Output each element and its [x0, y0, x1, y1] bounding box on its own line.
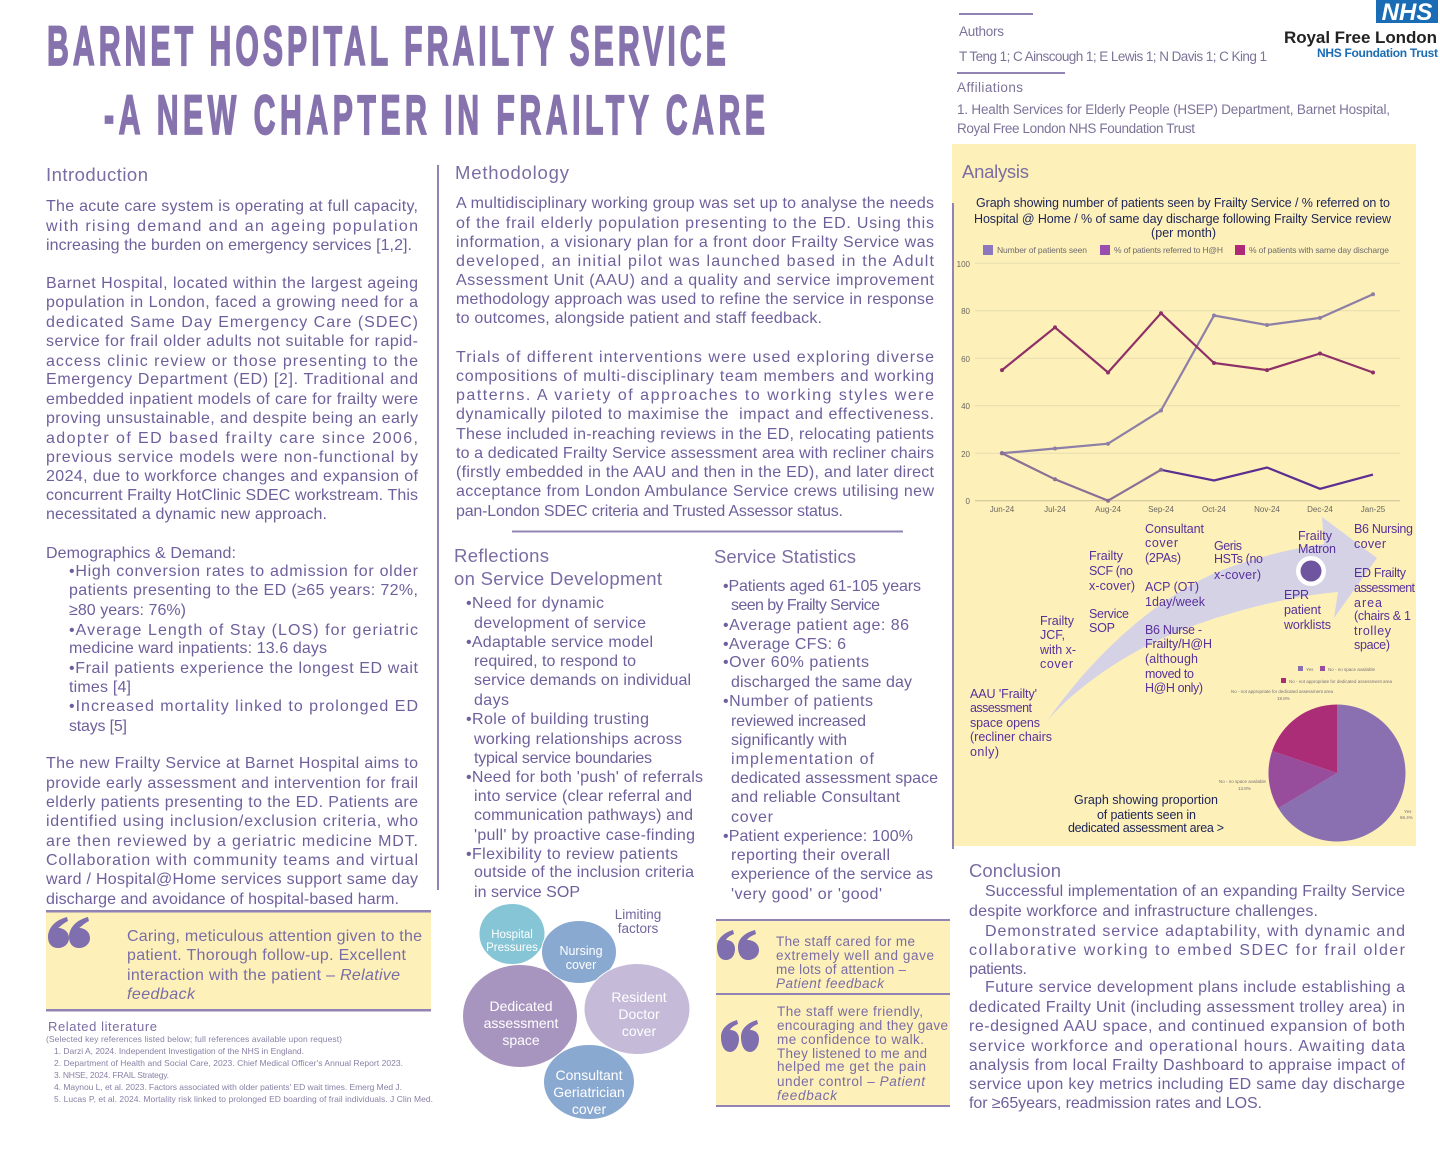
chart: limiting factors bubbles — [462, 904, 690, 1120]
pie chart: 13.8% — [1238, 786, 1251, 791]
text block: conclusion body: service upon key metrics including ED same day discharge — [969, 1076, 1405, 1093]
text block: introduction body: ward / Hospital@Home services support same day — [45, 871, 418, 888]
text block: conclusion body: for ≥65years, readmission rates and LOS. — [969, 1095, 1262, 1112]
quote text — [127, 928, 422, 1003]
label: B6 nursing cover and ED area: (chairs & 1 — [1354, 609, 1411, 623]
quote text: interaction with the patient – Relative — [127, 967, 400, 984]
text block: methodology body: pan-London SDEC criteria and Trusted Assessor status. — [456, 503, 843, 520]
icon: timeline marker — [1296, 556, 1326, 586]
text block: statistics bullets: •Number of patients — [723, 693, 873, 710]
text block: related literature: 2. Department of Health and Social Care, 2023. Chief Medical Officer's Annual Report 2023. — [54, 1058, 403, 1068]
pie chart: Yes — [1404, 809, 1412, 814]
label: consultant, ACP and B6 nurse: cover — [1145, 536, 1178, 550]
label: B6 nursing cover and ED area — [1354, 522, 1416, 652]
label: frailty SCF and service SOP: Frailty — [1089, 549, 1124, 563]
line chart: Jul-24 — [1044, 505, 1066, 514]
quote text: staff friendly: feedback — [777, 1088, 838, 1103]
bubble: dedicated assessment space — [462, 964, 578, 1068]
text block: statistics bullets: 'very good' or 'good' — [731, 886, 882, 903]
text block: introduction body: The acute care system is operating at full capacity, — [46, 198, 418, 215]
label: limiting factors: Limiting — [615, 907, 661, 922]
label: consultant, ACP and B6 nurse: (although — [1145, 652, 1198, 666]
label: EPR patient worklists: worklists — [1283, 618, 1331, 632]
label: frailty SCF and service SOP: SOP — [1089, 621, 1115, 635]
label: frailty matron — [1298, 529, 1336, 556]
label: geris HSTs — [1214, 539, 1263, 582]
text block: reflections bullets: typical service boundaries — [474, 750, 652, 767]
text block: introduction body: service for frail older adults not suitable for rapid- — [46, 333, 418, 350]
text block: statistics bullets: •Average patient age: 86 — [723, 617, 909, 634]
label: frailty matron: Frailty — [1298, 529, 1333, 543]
chart legend: % of patients with same day discharge — [1249, 245, 1389, 255]
chart legend: % of patients referred to H@H — [1114, 245, 1223, 255]
text block: related literature: Related literature — [48, 1019, 157, 1034]
heading: service statistics: Service Statistics — [714, 546, 856, 567]
pie chart caption: of patients seen in — [1097, 808, 1196, 822]
column divider — [437, 165, 439, 890]
text block: reflections bullets: •Need for both 'push' of referrals — [466, 769, 703, 786]
text block: methodology body: to outcomes, alongside patient and staff feedback. — [456, 310, 822, 327]
text block: methodology body: information, a visionary plan for a front door Frailty Service was — [456, 234, 934, 251]
bubble: hospital pressures — [479, 904, 545, 964]
title: -A NEW CHAPTER IN FRAILTY CARE — [104, 83, 765, 146]
label: B6 nursing cover and ED area: cover — [1354, 537, 1386, 551]
text block: statistics bullets: implementation of — [731, 751, 875, 768]
chart title — [974, 196, 1392, 240]
label: geris HSTs: x-cover) — [1214, 568, 1261, 582]
text block: statistics bullets: and reliable Consultant — [731, 789, 901, 806]
bubble: dedicated assessment space: space — [502, 1032, 540, 1048]
panel: introduction — [45, 164, 419, 908]
label: limiting factors: factors — [618, 921, 659, 936]
text block: related literature: 1. Darzi A, 2024. Independent Investigation of the NHS in England. — [54, 1046, 304, 1056]
text block: introduction body: Barnet Hospital, located within the largest ageing — [46, 275, 418, 292]
label: B6 nursing cover and ED area: space) — [1354, 638, 1390, 652]
text block: statistics bullets: •Over 60% patients — [723, 654, 869, 671]
label: EPR patient worklists: EPR — [1284, 588, 1309, 602]
label: consultant, ACP and B6 nurse: (2PAs) — [1145, 551, 1181, 565]
quote text: staff friendly: encouraging and they gave — [777, 1018, 948, 1033]
icon: quotation mark — [717, 930, 759, 960]
label: frailty JCF: cover — [1040, 657, 1073, 671]
bubble: hospital pressures: Hospital — [491, 929, 533, 941]
text block: methodology body: developed, an initial pilot was launched based in the Adult — [456, 253, 935, 270]
chart legend — [983, 245, 1389, 255]
text block: related literature: 5. Lucas P, et al. 2024. Mortality risk linked to prolonged ED boarding of frail individuals. J Clin Med. — [54, 1094, 433, 1104]
label: geris HSTs: HSTs (no — [1214, 552, 1263, 566]
text block: reflections bullets: communication pathways) and — [474, 807, 693, 824]
icon: quotation mark — [721, 1020, 759, 1052]
text block: introduction body: elderly patients presenting to the ED. Patients are — [46, 794, 418, 811]
logo: NHS Royal Free London — [1284, 0, 1438, 60]
label: AAU frailty space: AAU 'Frailty' — [970, 687, 1037, 701]
heading: reflections: on Service Development — [454, 568, 662, 589]
quote text: staff cared — [776, 934, 934, 991]
bubble: consultant geriatrician cover: Consultant — [556, 1067, 623, 1083]
heading: analysis: Analysis — [962, 161, 1029, 182]
icon: quotation mark — [48, 917, 90, 948]
text block: introduction body: identified using inclusion/exclusion criteria, who — [46, 813, 418, 830]
text block: statistics bullets: dedicated assessment space — [731, 770, 938, 787]
chart title: Graph showing number of patients seen by Frailty Service / % referred on to — [976, 196, 1390, 210]
quote text: feedback — [127, 986, 196, 1003]
text block: introduction body: population in London, faced a growing need for a — [46, 294, 418, 311]
text block: statistics bullets: reviewed increased — [731, 713, 866, 730]
text block: introduction body: 2024, due to workforce changes and expansion of — [46, 468, 419, 485]
bubble: resident doctor cover — [584, 964, 690, 1054]
quote text: staff friendly: helped me get the pain — [777, 1059, 926, 1074]
label: B6 nursing cover and ED area: trolley — [1354, 624, 1392, 638]
pie chart: No - no space available — [1219, 779, 1266, 784]
text block: conclusion body: dedicated Frailty Unit (including assessment trolley area) in — [969, 999, 1405, 1016]
chart title: (per month) — [1151, 226, 1216, 240]
bubble: consultant geriatrician cover — [544, 1044, 634, 1120]
text block: introduction body: discharge and avoidance of hospital-based harm. — [46, 891, 399, 908]
label: B6 nursing cover and ED area: assessment — [1354, 581, 1416, 595]
label: frailty SCF and service SOP: Service — [1089, 607, 1129, 621]
text block: introduction body: medicine ward inpatients: 13.6 days — [69, 640, 327, 657]
label: consultant, ACP and B6 nurse: Frailty/H@H — [1145, 637, 1212, 651]
text block: reflections bullets: in service SOP — [474, 884, 580, 901]
bubble: hospital pressures: Pressures — [486, 942, 538, 954]
label: EPR patient worklists — [1283, 588, 1331, 632]
text block: reflections bullets: •Role of building trusting — [466, 711, 649, 728]
text block: statistics bullets: •Patient experience: 100% — [723, 828, 913, 845]
panel: analysis — [952, 144, 1416, 849]
text block: conclusion body: Successful implementation of an expanding Frailty Service — [985, 883, 1405, 900]
line chart: 100 — [957, 260, 971, 269]
text block: introduction body: concurrent Frailty HotClinic SDEC workstream. This — [46, 487, 418, 504]
bubble: resident doctor cover: Resident — [611, 989, 667, 1005]
line chart: Aug-24 — [1095, 505, 1121, 514]
text block: statistics bullets: seen by Frailty Service — [731, 597, 880, 614]
text block: related literature: 3. NHSE, 2024. FRAIL Strategy. — [54, 1070, 169, 1080]
label: consultant, ACP and B6 nurse: moved to — [1145, 667, 1194, 681]
authors and affiliations: 1. Health Services for Elderly People (HSEP) Department, Barnet Hospital, — [957, 102, 1390, 117]
pie chart caption: Graph showing proportion — [1074, 793, 1218, 807]
text block: statistics bullets: significantly with — [731, 732, 847, 749]
text block: introduction body: increasing the burden on emergency services [1,2]. — [46, 237, 412, 254]
quote text: staff friendly: The staff were friendly, — [777, 1004, 923, 1019]
pie chart: 66.4% — [1400, 815, 1413, 820]
line chart: 80 — [961, 307, 971, 316]
pie chart — [1219, 666, 1413, 842]
line chart: Nov-24 — [1254, 505, 1280, 514]
text block: conclusion body: collaborative working to embed SDEC for frail older — [969, 942, 1406, 959]
panel: conclusion — [969, 860, 1406, 1112]
label: consultant, ACP and B6 nurse: B6 Nurse - — [1145, 623, 1202, 637]
text block: methodology body: These included in-reaching reviews in the ED, relocating patients — [456, 426, 934, 443]
chart title: Hospital @ Home / % of same day discharge following Frailty Service review — [974, 212, 1392, 226]
panel: reflections — [454, 545, 703, 901]
line chart: Oct-24 — [1202, 505, 1227, 514]
text block: introduction body: Demographics & Demand: — [46, 545, 236, 562]
pie chart: No - no space available — [1328, 667, 1375, 672]
bubble: resident doctor cover: Doctor — [618, 1006, 660, 1022]
heading: methodology: Methodology — [455, 162, 570, 183]
heading: introduction: Introduction — [46, 164, 148, 185]
text block: related literature — [46, 1019, 433, 1104]
label: frailty JCF: JCF, — [1040, 628, 1065, 642]
text block: methodology body: Trials of different interventions were used exploring diverse — [456, 349, 934, 366]
text block: methodology body: to a dedicated Frailty Service assessment area with recliner chairs — [456, 445, 934, 462]
text block: conclusion body: service workforce and operational hours. Awaiting data — [969, 1038, 1405, 1055]
line chart: Jan-25 — [1361, 505, 1386, 514]
pie chart: No - not appropriate for dedicated assessment area — [1231, 689, 1333, 694]
text block: related literature: (Selected key references listed below; full references available upon request) — [46, 1034, 342, 1044]
label: frailty SCF and service SOP: x-cover) — [1089, 579, 1135, 593]
authors and affiliations: Authors — [959, 24, 1004, 39]
text block: statistics bullets: discharged the same day — [731, 674, 912, 691]
bubble: dedicated assessment space: Dedicated — [489, 998, 553, 1014]
text block: methodology body: methodology approach was used to refine the service in response — [456, 291, 934, 308]
text block: introduction body: stays [5] — [69, 718, 127, 735]
label: limiting factors — [615, 907, 661, 936]
text block: methodology body: acceptance from London Ambulance Service crews utilising new — [456, 483, 934, 500]
label: consultant, ACP and B6 nurse: ACP (OT) — [1145, 580, 1199, 594]
text block: conclusion body: despite workforce and infrastructure challenges. — [969, 903, 1318, 920]
text block: related literature: 4. Maynou L, et al. 2023. Factors associated with older patients' ED wait times. Emerg Med J. — [54, 1082, 402, 1092]
arrow: service timeline — [1047, 517, 1377, 721]
quote text: staff friendly — [777, 1004, 948, 1103]
text block: reflections bullets: development of service — [474, 615, 646, 632]
label: B6 nursing cover and ED area: area — [1354, 596, 1382, 610]
text block: reflections bullets: 'pull' by proactive case-finding — [474, 827, 695, 844]
text block: introduction body: necessitated a dynamic new approach. — [46, 506, 327, 523]
text block: methodology body — [456, 195, 935, 520]
label: AAU frailty space: space opens — [970, 716, 1040, 730]
text block: introduction body: embedded inpatient models of care for frailty were — [46, 391, 418, 408]
text block: introduction body: patients presenting to the ED (≥65 years: 72%, — [69, 582, 418, 599]
authors and affiliations: Royal Free London NHS Foundation Trust — [957, 121, 1195, 136]
panel: service statistics — [714, 546, 938, 903]
text block: reflections bullets: working relationships across — [473, 731, 682, 748]
heading: reflections — [454, 545, 662, 589]
line chart: 60 — [961, 355, 971, 364]
text block: reflections bullets: into service (clear referral and — [474, 788, 692, 805]
line chart — [957, 260, 1400, 514]
label: frailty SCF and service SOP — [1089, 549, 1135, 635]
text block: methodology body: of the frail elderly population presenting to the ED. Using this — [456, 215, 934, 232]
quote text: staff cared: me lots of attention – — [776, 962, 906, 977]
line chart: Sep-24 — [1148, 505, 1174, 514]
text block: methodology body: compositions of multi-disciplinary team members and working — [456, 368, 934, 385]
line chart: 40 — [961, 402, 971, 411]
logo: NHS Royal Free London: Royal Free London — [1284, 28, 1437, 47]
text block: reflections bullets: service demands on individual — [474, 672, 691, 689]
heading: conclusion: Conclusion — [969, 860, 1061, 881]
timeline labels — [970, 522, 1416, 759]
authors and affiliations: T Teng 1; C Ainscough 1; E Lewis 1; N Davis 1; C King 1 — [959, 49, 1267, 64]
text block: reflections bullets: outside of the inclusion criteria — [474, 864, 694, 881]
pie chart caption: dedicated assessment area > — [1068, 821, 1224, 835]
pie chart: No - not appropriate for dedicated assessment area — [1289, 679, 1392, 684]
label: B6 nursing cover and ED area: B6 Nursing — [1354, 522, 1413, 536]
label: consultant, ACP and B6 nurse: Consultant — [1145, 522, 1205, 536]
logo: NHS Royal Free London: NHS Foundation Trust — [1317, 46, 1438, 60]
bubble: dedicated assessment space: assessment — [484, 1015, 558, 1031]
quote text: staff cared: extremely well and gave — [776, 948, 934, 963]
label: AAU frailty space — [970, 687, 1052, 759]
text block: introduction body: Emergency Department (ED) [2]. Traditional and — [46, 371, 418, 388]
text block: conclusion body: Future service development plans include establishing a — [985, 979, 1405, 996]
quote text: staff cared: The staff cared for me — [776, 934, 915, 949]
quote text: staff friendly: They listened to me and — [777, 1046, 927, 1061]
text block: reflections bullets: •Need for dynamic — [466, 595, 604, 612]
label: consultant, ACP and B6 nurse: H@H only) — [1145, 681, 1203, 695]
bubble: nursing cover: cover — [566, 958, 596, 972]
chart legend: Number of patients seen — [997, 245, 1087, 255]
callout: patient feedback quotes — [716, 919, 950, 1107]
text block: introduction body: with rising demand and an ageing population — [45, 218, 418, 235]
authors and affiliations: Affiliations — [957, 80, 1023, 95]
label: AAU frailty space: only) — [970, 745, 999, 759]
quote text: staff friendly: me confidence to walk. — [777, 1032, 924, 1047]
label: EPR patient worklists: patient — [1284, 603, 1322, 617]
text block: introduction body: •Increased mortality linked to prolonged ED — [69, 698, 418, 715]
text block: conclusion body: re-designed AAU space, and continued expansion of both — [969, 1018, 1405, 1035]
text block: statistics bullets: •Average CFS: 6 — [723, 636, 846, 653]
text block: conclusion body: analysis from local Frailty Dashboard to appraise impact of — [969, 1057, 1406, 1074]
quote text: staff cared: Patient feedback — [776, 976, 885, 991]
bubble: nursing cover — [542, 920, 616, 984]
text block: introduction body: access clinic review or those presenting to the — [46, 353, 418, 370]
label: frailty JCF — [1039, 614, 1076, 671]
label: consultant, ACP and B6 nurse: 1day/week — [1145, 595, 1206, 609]
text block: introduction body: •Average Length of Stay (LOS) for geriatric — [69, 622, 418, 639]
bubble: resident doctor cover: cover — [622, 1023, 656, 1039]
text block: statistics bullets: experience of the service as — [731, 866, 933, 883]
quote text: Caring, meticulous attention given to the — [127, 928, 422, 945]
line chart: Jun-24 — [990, 505, 1015, 514]
text block: introduction body: times [4] — [69, 679, 131, 696]
label: B6 nursing cover and ED area: ED Frailty — [1354, 566, 1407, 580]
text block: introduction body: proving unsustainable, and despite being an early — [46, 410, 418, 427]
bubble: consultant geriatrician cover: cover — [572, 1101, 606, 1117]
quote text: staff friendly: under control – Patient — [777, 1074, 926, 1089]
callout: relative feedback quote — [46, 910, 431, 1012]
label: consultant, ACP and B6 nurse — [1145, 522, 1212, 695]
text block: introduction body: dedicated Same Day Emergency Care (SDEC) — [46, 314, 418, 331]
text block: reflections bullets: •Flexibility to review patients — [466, 846, 678, 863]
text block: introduction body: ≥80 years: 76%) — [69, 602, 186, 619]
text block: methodology body: (firstly embedded in the AAU and then in the ED), and later direct — [456, 464, 935, 481]
text block: introduction body: Collaboration with community teams and virtual — [46, 852, 418, 869]
text block: conclusion body — [969, 883, 1406, 1112]
text block: introduction body: •High conversion rates to admission for older — [69, 563, 419, 580]
authors and affiliations — [957, 13, 1390, 136]
pie chart: Yes — [1306, 667, 1314, 672]
text block: statistics bullets: •Patients aged 61-105 years — [723, 578, 921, 595]
bubble: consultant geriatrician cover: Geriatrician — [553, 1084, 625, 1100]
text block: introduction body: •Frail patients experience the longest ED wait — [69, 660, 419, 677]
bubble: nursing cover: Nursing — [559, 944, 603, 958]
line chart: 0 — [966, 497, 971, 506]
label: frailty JCF: Frailty — [1040, 614, 1075, 628]
text block: methodology body: Assessment Unit (AAU) and a quality and service improvement — [456, 272, 935, 289]
panel: methodology — [455, 162, 935, 520]
label: AAU frailty space: assessment — [970, 701, 1033, 715]
text block: introduction body — [45, 198, 419, 908]
text block: reflections bullets: •Adaptable service model — [466, 634, 653, 651]
line chart: Dec-24 — [1307, 505, 1333, 514]
text block: methodology body: dynamically piloted to maximise the impact and effectiveness. — [456, 406, 934, 423]
text block: conclusion body: patients. — [969, 961, 1027, 978]
heading: reflections: Reflections — [454, 545, 549, 566]
title: BARNET HOSPITAL FRAILTY SERVICE — [47, 14, 726, 77]
text block: reflections bullets: required, to respond to — [474, 653, 636, 670]
text block: methodology body: A multidisciplinary working group was set up to analyse the needs — [456, 195, 934, 212]
label: frailty matron: Matron — [1298, 542, 1336, 556]
text block: introduction body: adopter of ED based frailty care since 2006, — [46, 430, 418, 447]
text block: introduction body: previous service models were non-functional by — [46, 449, 418, 466]
text block: methodology body: patterns. A variety of approaches to working styles were — [456, 387, 934, 404]
pie chart caption — [1068, 793, 1224, 835]
label: geris HSTs: Geris — [1214, 539, 1242, 553]
text block: introduction body: The new Frailty Service at Barnet Hospital aims to — [46, 755, 418, 772]
title — [47, 14, 765, 146]
text block: statistics bullets: cover — [731, 809, 774, 826]
quote text: patient. Thorough follow-up. Excellent — [127, 947, 407, 964]
label: frailty JCF: with x- — [1039, 643, 1076, 657]
text block: reflections bullets: days — [474, 692, 509, 709]
label: AAU frailty space: (recliner chairs — [970, 730, 1052, 744]
pie chart: 19.8% — [1277, 696, 1290, 701]
line chart: 20 — [961, 450, 971, 459]
text block: statistics bullets: reporting their overall — [731, 847, 890, 864]
text block: reflections bullets — [466, 595, 703, 901]
label: frailty SCF and service SOP: SCF (no — [1089, 564, 1133, 578]
text block: introduction body: provide early assessment and intervention for frail — [46, 775, 418, 792]
text block: conclusion body: Demonstrated service adaptability, with dynamic and — [985, 923, 1405, 940]
section divider — [512, 530, 903, 532]
text block: statistics bullets — [723, 578, 938, 903]
text block: introduction body: are then reviewed by a geriatric medicine MDT. — [46, 833, 418, 850]
